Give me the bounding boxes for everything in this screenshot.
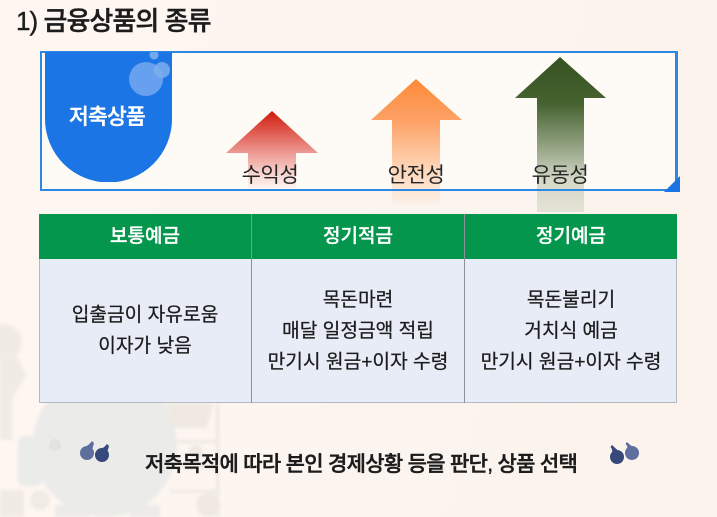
arrow label: return: 수익성 xyxy=(242,164,298,187)
arrow: return xyxy=(226,111,318,188)
label: savings products: 저축상품 xyxy=(69,105,145,129)
icon: closing quotation mark xyxy=(610,442,639,464)
arrow label: liquidity: 유동성 xyxy=(532,164,588,187)
header: time deposit: 정기예금 xyxy=(536,226,606,247)
cell: time deposit: 목돈불리기 xyxy=(527,290,615,311)
title: 1) 금융상품의 종류 xyxy=(16,6,211,36)
cell: ordinary deposit xyxy=(72,304,218,357)
cell: ordinary deposit: 이자가 낮음 xyxy=(98,336,192,357)
table: product comparison xyxy=(39,214,677,403)
header: ordinary deposit: 보통예금 xyxy=(110,226,180,247)
panel border overlay xyxy=(41,52,676,190)
header row xyxy=(39,214,677,259)
cell: installment savings: 매달 일정금액 적립 xyxy=(282,321,434,342)
cell: ordinary deposit: 입출금이 자유로움 xyxy=(72,305,218,326)
blue tab with bubbles xyxy=(45,52,172,182)
conclusion text: 저축목적에 따라 본인 경제상황 등을 판단, 상품 선택 xyxy=(145,453,577,476)
cell: time deposit: 거치식 예금 xyxy=(524,321,618,342)
column divider xyxy=(464,214,465,403)
cell: installment savings: 목돈마련 xyxy=(323,290,393,311)
arrow: liquidity xyxy=(515,57,606,212)
cell: installment savings: 만기시 원금+이자 수령 xyxy=(268,352,448,373)
icon: opening quotation mark xyxy=(80,441,109,462)
header: installment savings: 정기적금 xyxy=(323,226,393,247)
cell: time deposit xyxy=(481,290,661,373)
arrow label: safety: 안전성 xyxy=(388,164,444,187)
panel: savings product box xyxy=(40,51,678,191)
column divider xyxy=(251,214,252,403)
cell: installment savings xyxy=(268,290,448,373)
icon: blue corner fold xyxy=(664,176,680,192)
product label shape xyxy=(45,52,172,182)
cell: time deposit: 만기시 원금+이자 수령 xyxy=(481,352,661,373)
arrow: safety xyxy=(371,79,462,204)
